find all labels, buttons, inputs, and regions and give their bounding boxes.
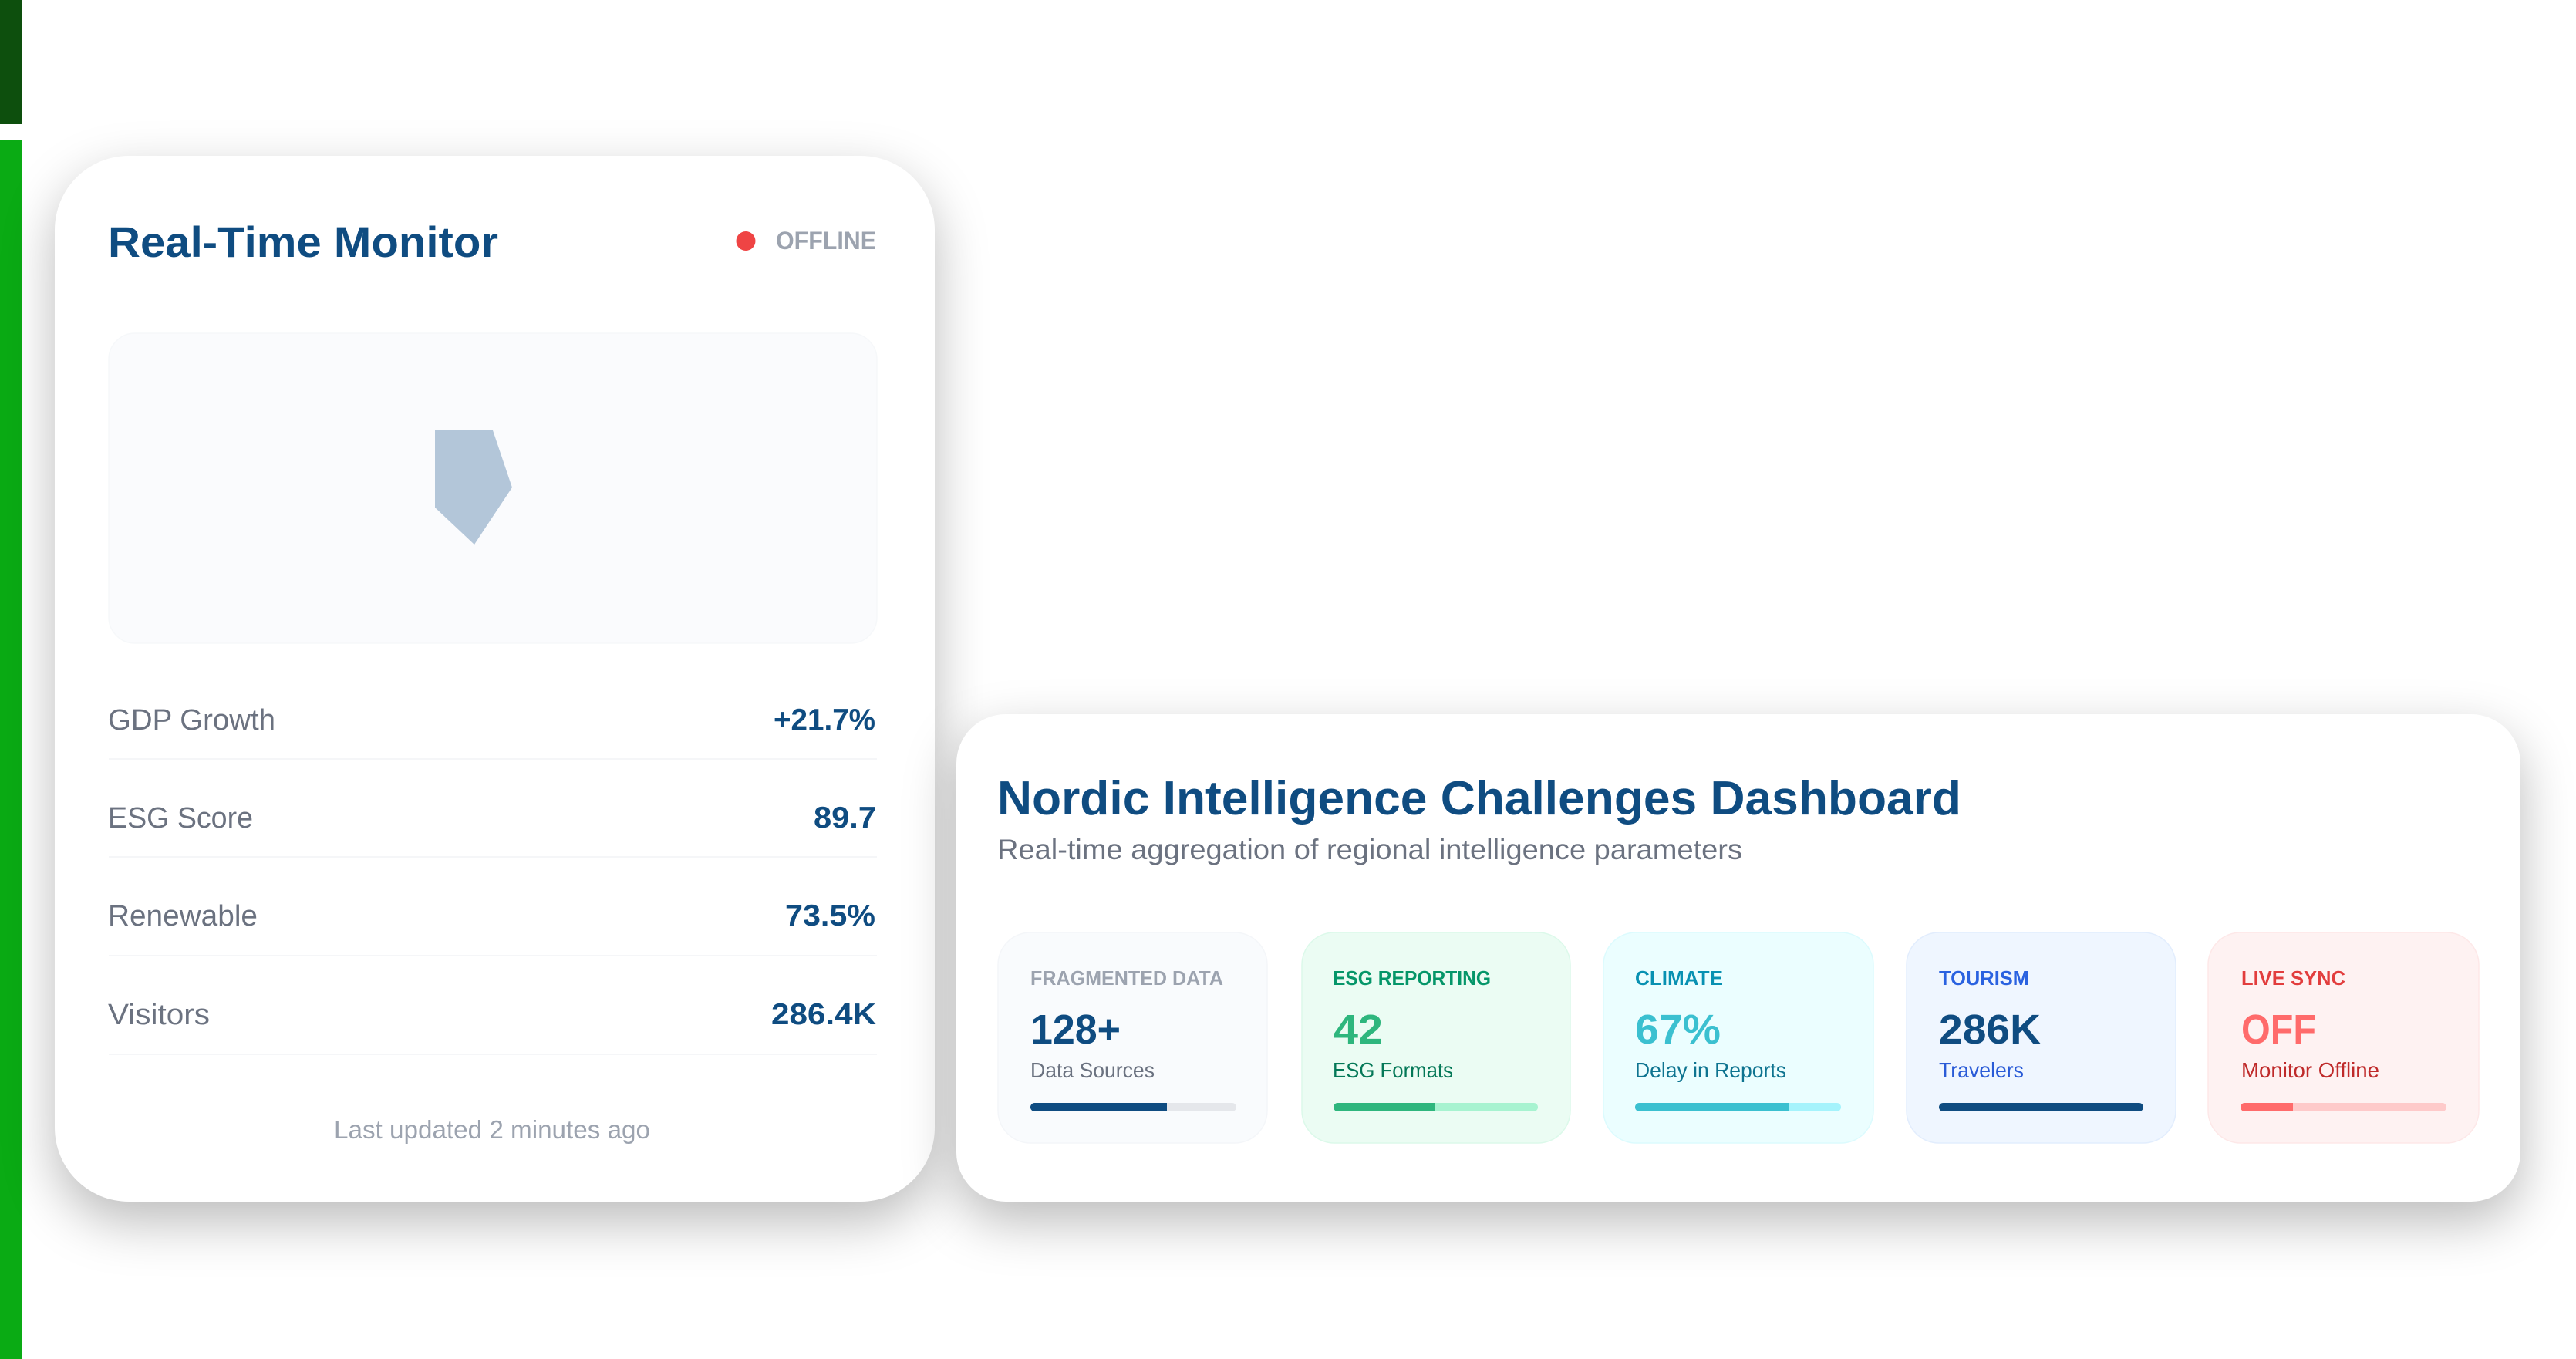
metric label: ESG Score (108, 802, 253, 835)
card background (1907, 932, 2176, 1143)
card sublabel: Data Sources (1030, 1058, 1155, 1082)
metric value: +21.7% (774, 703, 875, 737)
icon: map shape (435, 430, 512, 545)
progress bar (1939, 1103, 2143, 1111)
metric value: 73.5% (785, 899, 875, 932)
card sublabel: Monitor Offline (2241, 1058, 2379, 1082)
card label: TOURISM (1939, 966, 2029, 990)
progress bar (2241, 1103, 2446, 1111)
progress bar (1635, 1103, 1841, 1111)
card sublabel: Delay in Reports (1635, 1058, 1786, 1082)
card label: CLIMATE (1635, 966, 1723, 990)
metric value: 286.4K (771, 998, 876, 1031)
card background (2208, 932, 2479, 1143)
footnote: last updated: Last updated 2 minutes ago (334, 1115, 650, 1144)
status: offline (736, 227, 876, 255)
panel: challenges dashboard (956, 714, 2520, 1202)
map background (109, 333, 877, 643)
card label: LIVE SYNC (2241, 966, 2345, 990)
card value: 286K (1939, 1007, 2041, 1053)
stat card: fragmented data (998, 932, 1267, 1143)
map panel (109, 333, 877, 643)
subtitle: Real-time aggregation of regional intelligence parameters (997, 834, 1742, 865)
card sublabel: ESG Formats (1333, 1058, 1453, 1082)
card background (998, 932, 1267, 1143)
card value: 42 (1334, 1007, 1383, 1053)
stat card: ESG reporting (1302, 932, 1570, 1143)
card value: 128+ (1030, 1007, 1121, 1053)
metric: ESG Score (108, 801, 876, 835)
metric: Visitors (108, 998, 876, 1031)
metric: GDP Growth (108, 703, 875, 737)
metric: Renewable (108, 899, 875, 932)
icon: red status dot (736, 231, 756, 251)
card label: FRAGMENTED DATA (1030, 966, 1223, 990)
accent bar: dark green (0, 0, 22, 124)
stat card: tourism (1907, 932, 2176, 1143)
accent bar: bright green (0, 140, 22, 1359)
card sublabel: Travelers (1939, 1058, 2024, 1082)
heading: Real-Time Monitor: Real-Time Monitor (108, 218, 498, 266)
metric label: GDP Growth (108, 704, 275, 737)
metric label: Renewable (108, 900, 258, 932)
status label: OFFLINE (776, 227, 876, 255)
heading: dashboard title: Nordic Intelligence Challenges Dashboard (997, 772, 1961, 825)
progress bar (1030, 1103, 1236, 1111)
card value: 67% (1635, 1007, 1721, 1053)
card label: ESG REPORTING (1333, 966, 1491, 990)
stat card: live sync (2208, 932, 2479, 1143)
panel: real-time monitor (55, 156, 935, 1202)
metric value: 89.7 (814, 801, 876, 835)
card background (1603, 932, 1873, 1143)
metric label: Visitors (108, 999, 210, 1031)
progress bar (1334, 1103, 1538, 1111)
stat card: climate (1603, 932, 1873, 1143)
card value: OFF (2241, 1007, 2316, 1053)
card background (1302, 932, 1570, 1143)
